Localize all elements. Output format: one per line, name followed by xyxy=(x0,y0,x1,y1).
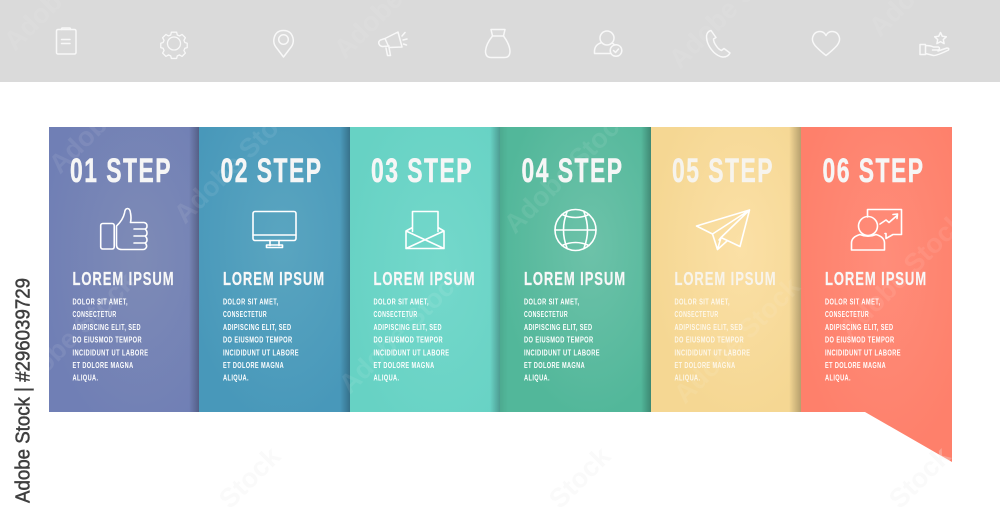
step 3 body text: ADIPISCING ELIT, SED xyxy=(374,322,442,332)
text: Adobe Stock xyxy=(833,206,972,344)
icon: monitor xyxy=(253,212,296,248)
text: Adobe xyxy=(43,99,124,179)
step 1 body text: CONSECTETUR xyxy=(72,309,117,319)
panel: step 6 with folded tail xyxy=(801,127,952,462)
step 1 body text: ALIQUA. xyxy=(72,373,98,383)
step 3 body text: INCIDIDUNT UT LABORE xyxy=(374,347,450,357)
step 3 body text: ALIQUA. xyxy=(374,373,400,383)
text: Stock xyxy=(543,440,617,514)
panel: step 1 xyxy=(49,127,199,412)
icon: megaphone xyxy=(379,32,407,56)
step 4 body text: ALIQUA. xyxy=(524,373,550,383)
header band with icons xyxy=(0,0,1000,82)
step 1 heading: 01 STEP xyxy=(70,152,172,190)
step 1 body text: DOLOR SIT AMET, xyxy=(72,296,128,306)
step 3 body text: DOLOR SIT AMET, xyxy=(374,296,429,306)
icon: user with check xyxy=(594,31,622,56)
step 5 subheading: LOREM IPSUM xyxy=(674,268,776,289)
icon: thumbs up xyxy=(101,208,147,250)
step 3 subheading: LOREM IPSUM xyxy=(374,268,476,289)
step 2 body text: INCIDIDUNT UT LABORE xyxy=(223,347,299,357)
icon: paper plane xyxy=(696,210,750,250)
panel: step 4 xyxy=(500,127,651,412)
step 2 subheading: LOREM IPSUM xyxy=(223,268,325,289)
panel: step 5 xyxy=(651,127,801,412)
step 6 body text: ADIPISCING ELIT, SED xyxy=(825,322,894,332)
step 2 body text: ET DOLORE MAGNA xyxy=(223,360,284,370)
step 6 body text: DO EIUSMOD TEMPOR xyxy=(825,335,895,345)
step 4 body text xyxy=(524,296,600,383)
step 6 body text: ALIQUA. xyxy=(825,373,851,383)
step 3 body text: ET DOLORE MAGNA xyxy=(374,360,434,370)
step 4 body text: INCIDIDUNT UT LABORE xyxy=(524,347,600,357)
step 5 body text: ALIQUA. xyxy=(674,373,700,383)
step 5 body text: ET DOLORE MAGNA xyxy=(674,360,736,370)
step 2 body text: DOLOR SIT AMET, xyxy=(223,296,278,306)
panel: step 2 xyxy=(199,127,350,412)
step 6 body text: CONSECTETUR xyxy=(825,309,869,319)
step 1 body text: INCIDIDUNT UT LABORE xyxy=(72,347,148,357)
step 5 body text: DO EIUSMOD TEMPOR xyxy=(674,335,744,345)
step 2 heading: 02 STEP xyxy=(220,152,322,190)
step 2 body text xyxy=(223,296,299,383)
step 5 body text xyxy=(674,296,750,383)
step 2 body text: DO EIUSMOD TEMPOR xyxy=(223,335,293,345)
panel: step 3 xyxy=(350,127,500,412)
icon: location pin xyxy=(274,30,293,57)
step 5 heading: 05 STEP xyxy=(672,152,774,190)
icon: clipboard xyxy=(56,28,76,54)
step 4 body text: ADIPISCING ELIT, SED xyxy=(524,322,592,332)
icon: telephone xyxy=(706,30,730,57)
icon: money bag xyxy=(486,30,510,58)
icon: gear xyxy=(161,32,187,58)
step 6 heading: 06 STEP xyxy=(822,152,924,190)
vertical stock credit: Adobe Stock | #296039729 xyxy=(12,278,34,503)
text: Adobe Stock xyxy=(668,271,807,409)
step 1 body text: ADIPISCING ELIT, SED xyxy=(72,322,141,332)
icon: person with chart xyxy=(852,210,902,250)
step 5 body text: CONSECTETUR xyxy=(674,309,719,319)
text: Stock xyxy=(213,440,287,514)
step 2 body text: ADIPISCING ELIT, SED xyxy=(223,322,292,332)
text: Adobe Stock xyxy=(498,101,637,239)
step 6 body text: DOLOR SIT AMET, xyxy=(825,296,880,306)
step 4 body text: DOLOR SIT AMET, xyxy=(524,296,580,306)
step 1 body text xyxy=(72,296,148,383)
step 4 body text: DO EIUSMOD TEMPOR xyxy=(524,335,594,345)
step 3 heading: 03 STEP xyxy=(371,152,473,190)
step 1 body text: ET DOLORE MAGNA xyxy=(72,360,134,370)
step 3 body text: DO EIUSMOD TEMPOR xyxy=(374,335,443,345)
step 6 body text: INCIDIDUNT UT LABORE xyxy=(825,347,901,357)
text: Adobe Stock xyxy=(3,266,142,404)
step 6 subheading: LOREM IPSUM xyxy=(825,268,927,289)
text: Adobe Stock xyxy=(333,261,472,399)
step 2 body text: CONSECTETUR xyxy=(223,309,267,319)
text: Stock xyxy=(883,440,957,514)
icon: globe xyxy=(555,210,596,250)
icon: open envelope xyxy=(406,212,444,248)
step 4 body text: CONSECTETUR xyxy=(524,309,568,319)
step 6 body text: ET DOLORE MAGNA xyxy=(825,360,886,370)
step 5 body text: DOLOR SIT AMET, xyxy=(674,296,730,306)
step 5 body text: ADIPISCING ELIT, SED xyxy=(674,322,743,332)
icon: heart xyxy=(812,32,840,56)
step 1 subheading: LOREM IPSUM xyxy=(72,268,174,289)
step 4 heading: 04 STEP xyxy=(522,152,624,190)
step 2 body text: ALIQUA. xyxy=(223,373,249,383)
step 1 body text: DO EIUSMOD TEMPOR xyxy=(72,335,142,345)
step 5 body text: INCIDIDUNT UT LABORE xyxy=(674,347,750,357)
step 6 body text xyxy=(825,296,901,383)
step 3 body text xyxy=(374,296,450,383)
step 3 body text: CONSECTETUR xyxy=(374,309,418,319)
step 4 subheading: LOREM IPSUM xyxy=(524,268,626,289)
text: Adobe Stock xyxy=(168,91,307,229)
step 4 body text: ET DOLORE MAGNA xyxy=(524,360,585,370)
icon: hand with star xyxy=(920,32,949,56)
